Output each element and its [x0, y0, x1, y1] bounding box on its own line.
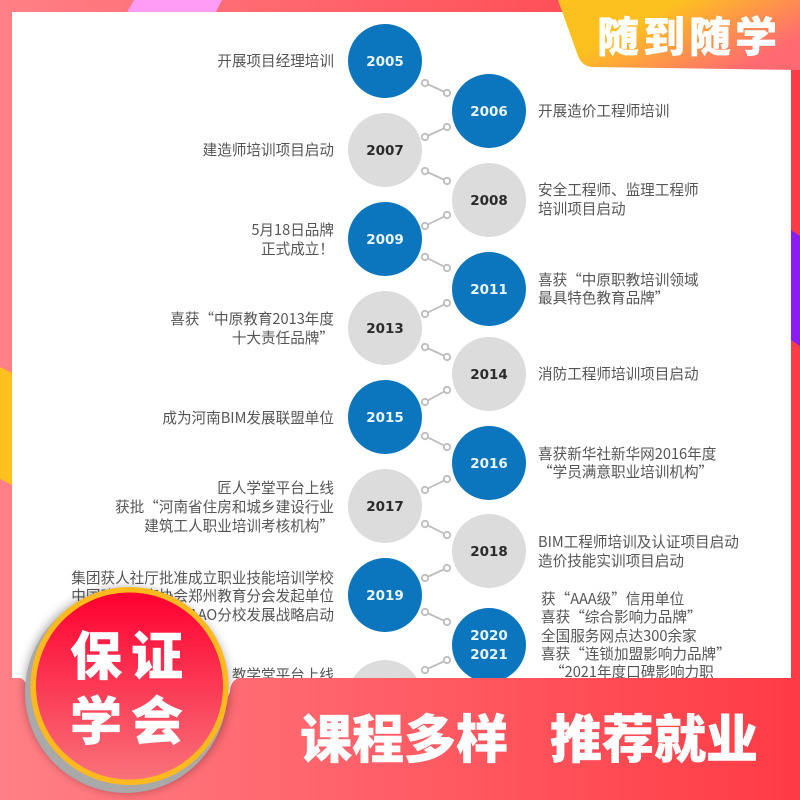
text 2019 — [72, 570, 334, 622]
text 2009: 5月18日品牌 — [251, 219, 334, 240]
text 2016: “学员满意职业培训机构” — [538, 461, 713, 482]
node 2015 — [348, 380, 422, 454]
connectors — [422, 80, 450, 673]
node 2017: 2017 — [366, 499, 404, 515]
text 2005: 开展项目经理培训 — [217, 50, 334, 71]
node 2011: 2011 — [470, 282, 508, 298]
node 2018: 2018 — [470, 544, 508, 560]
text 2011: 最具特色教育品牌” — [538, 287, 669, 308]
node 2014 — [452, 337, 526, 411]
node 2008 — [452, 163, 526, 237]
badge text: 保证 — [70, 615, 192, 690]
node 2007: 2007 — [366, 143, 404, 159]
node 2013 — [348, 291, 422, 365]
text 2015: 成为河南BIM发展联盟单位 — [162, 407, 334, 428]
node partial grey — [354, 660, 416, 678]
text 2017: 建筑工人职业培训考核机构” — [144, 515, 334, 536]
text 2019: 集团获人社厅批准成立职业技能培训学校 — [71, 567, 334, 588]
node 2013: 2013 — [366, 321, 404, 337]
node 2019: 2019 — [366, 588, 404, 604]
text 2020-2021: 获“AAA级”信用单位 — [541, 588, 684, 609]
node 2018 — [452, 514, 526, 588]
text 2016 — [538, 446, 716, 479]
text 2020-2021: “2021年度口碑影响力职 — [550, 661, 714, 682]
band circular cutout — [20, 678, 238, 760]
node 2005: 2005 — [366, 54, 404, 70]
node 2014: 2014 — [470, 367, 508, 383]
node 2009: 2009 — [366, 232, 404, 248]
badge: guarantee circle — [25, 587, 229, 793]
bottom band — [0, 678, 800, 800]
text 2011 — [538, 272, 698, 305]
node 2015: 2015 — [366, 410, 404, 426]
text 2020-2021: 全国服务网点达300余家 — [541, 625, 697, 646]
text 2007: 建造师培训项目启动 — [203, 139, 334, 160]
decoration: purple right band — [791, 230, 800, 346]
node 2019 — [348, 558, 422, 632]
node 2020-2021 — [452, 608, 526, 682]
text 2006: 开展造价工程师培训 — [538, 100, 669, 121]
timeline — [71, 24, 739, 734]
text 2016: 喜获新华社新华网2016年度 — [538, 443, 717, 464]
text 2008 — [538, 182, 698, 216]
tab title: 随到随学 — [597, 4, 781, 65]
decoration: yellow left band — [0, 367, 12, 485]
text 2009: 正式成立！ — [261, 238, 334, 259]
badge: guarantee circle: 学会 — [70, 680, 192, 755]
text 2019: AAO分校发展战略启动 — [189, 604, 334, 625]
node 2016: 2016 — [470, 456, 508, 472]
text 2009 — [252, 222, 334, 256]
text 2013: 十大责任品牌” — [232, 327, 334, 348]
text 2020-2021 — [542, 591, 722, 678]
node 2017 — [348, 469, 422, 543]
badge: top right tab — [558, 0, 800, 70]
bottom slogan: jobs: 推荐就业 — [550, 698, 758, 773]
node 2006: 2006 — [470, 104, 508, 120]
text 2017 — [116, 480, 334, 533]
text 2008: 培训项目启动 — [538, 198, 626, 219]
text 2017: 匠人学堂平台上线 — [217, 477, 334, 498]
text 2018 — [538, 534, 738, 568]
bottom slogan: courses: 课程多样 — [300, 698, 508, 773]
text 2011: 喜获“中原职教培训领域 — [538, 269, 699, 290]
text 2008: 安全工程师、监理工程师 — [538, 179, 699, 200]
node 2020-2021: 2020 — [470, 628, 508, 644]
text 2019: 中国建设教育协会郑州教育分会发起单位 — [71, 585, 334, 606]
text 2014: 消防工程师培训项目启动 — [538, 363, 699, 384]
node 2016 — [452, 426, 526, 500]
node 2008: 2008 — [470, 193, 508, 209]
text 2013 — [170, 311, 334, 345]
node 2007 — [348, 113, 422, 187]
text 2018: BIM工程师培训及认证项目启动 — [538, 531, 739, 552]
text 2018: 造价技能实训项目启动 — [538, 550, 684, 571]
text 2013: 喜获“中原教育2013年度 — [170, 308, 334, 329]
text 2017: 获批“河南省住房和城乡建设行业 — [115, 496, 334, 517]
node 2005 — [348, 24, 422, 98]
node 2006 — [452, 74, 526, 148]
text 2020-2021: 喜获“综合影响力品牌” — [541, 606, 702, 627]
decoration: pink parallelogram — [127, 0, 222, 12]
text partial: 教学堂平台上线 — [232, 664, 334, 685]
node 2011 — [452, 252, 526, 326]
node 2020-2021: 2021 — [470, 647, 508, 663]
text 2020-2021: 喜获“连锁加盟影响力品牌” — [541, 643, 731, 664]
node 2009 — [348, 202, 422, 276]
